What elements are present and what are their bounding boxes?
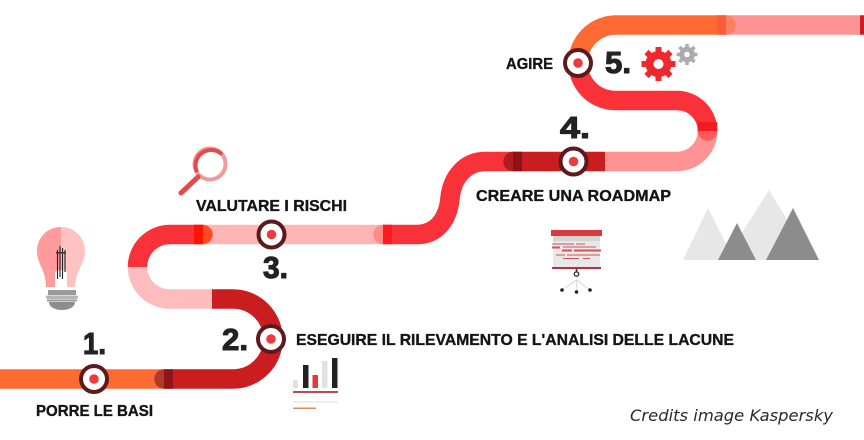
label: step 5: AGIRE [506,56,553,73]
marker 1 [81,366,107,392]
label: step 3: VALUTARE I RISCHI [196,198,347,215]
icon: bar chart [293,358,338,409]
icon: red gear [642,47,676,81]
step number 2: 2. [222,322,248,357]
credits: Credits image Kaspersky [630,406,834,425]
marker 4 [560,148,586,174]
mountains [683,190,819,260]
step number 4: 4. [560,110,590,145]
marker 5 [565,50,591,76]
label: step 2: ESEGUIRE IL RILEVAMENTO E L'ANALISI DELLE LACUNE [296,332,734,349]
icon: grey gear [676,44,698,65]
label: step 4: CREARE UNA ROADMAP [476,188,671,205]
icon: light bulb [37,227,85,310]
marker 2 [258,326,284,352]
label: step 1: PORRE LE BASI [36,403,153,420]
icon: presentation board [551,230,602,294]
step number 1: 1. [83,326,106,361]
step number 5: 5. [605,45,631,80]
step number 3: 3. [263,250,288,285]
icon: magnifying glass [181,148,226,193]
marker 3 [258,222,284,248]
